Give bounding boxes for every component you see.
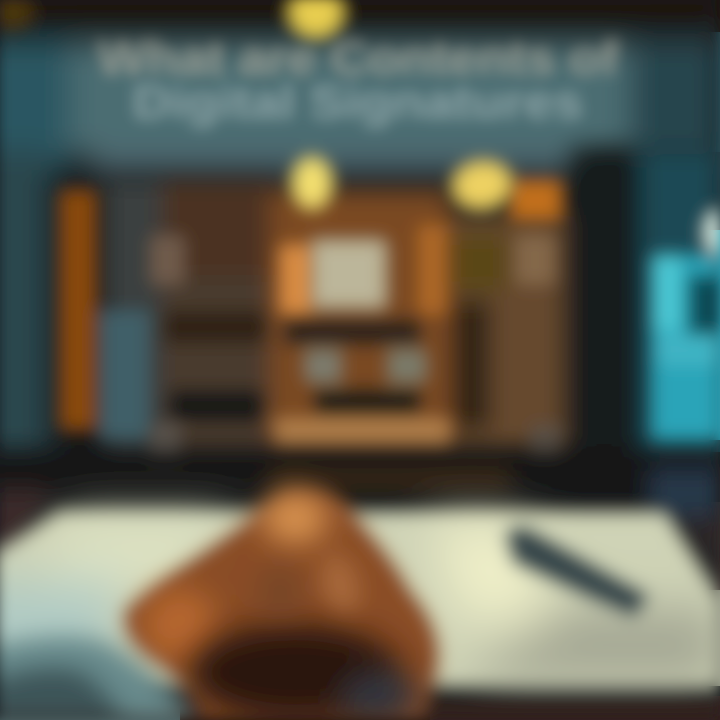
glowing cyan screen bbox=[652, 210, 720, 440]
hand bbox=[124, 490, 439, 720]
corner lamp glow bbox=[0, 0, 34, 30]
left shelf lamp bbox=[292, 157, 332, 209]
shelf highlights and shadows bbox=[150, 235, 560, 460]
paper sheet on desk bbox=[0, 512, 720, 686]
title: What are Contents of bbox=[98, 32, 619, 84]
ceiling lamp bbox=[288, 0, 344, 38]
sleeve bbox=[0, 636, 195, 720]
dark desk edge bbox=[0, 452, 720, 590]
title bbox=[98, 32, 619, 128]
pen bbox=[506, 527, 648, 616]
bookshelf area bbox=[105, 150, 720, 460]
framed white picture on shelf bbox=[312, 240, 386, 308]
desk front shadow bbox=[0, 700, 720, 720]
right shelf lamp bbox=[449, 157, 515, 213]
orange pillars bbox=[60, 180, 562, 440]
title: Digital Signatures bbox=[133, 76, 583, 128]
